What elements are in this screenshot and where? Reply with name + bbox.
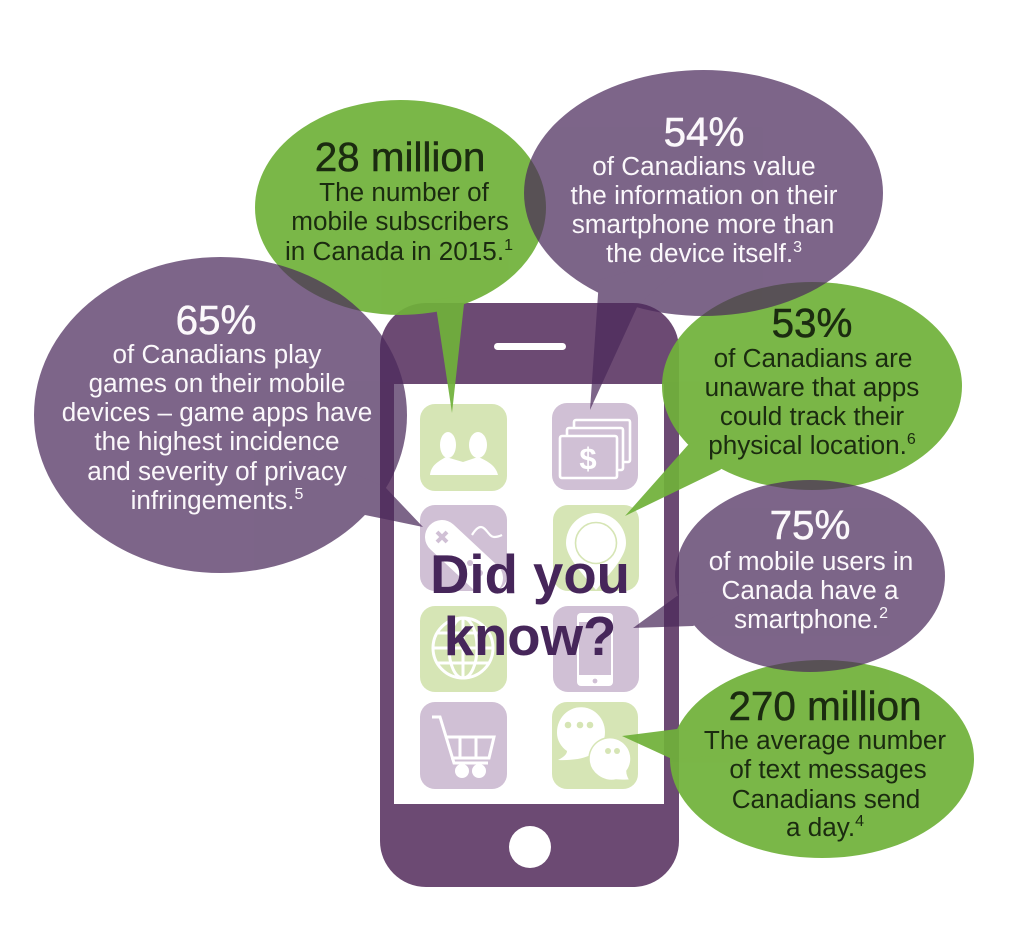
- callout: 53 percent: of Canadians are: [714, 343, 912, 373]
- bubble and tail: [255, 100, 546, 413]
- callout: 65 percent: devices – game apps have: [62, 397, 372, 427]
- icon: chat bubbles: [552, 702, 638, 789]
- callout: 75 percent: [633, 480, 945, 672]
- callout: 28 million: The number of: [319, 177, 490, 207]
- callout: 28 million: 1: [504, 237, 513, 254]
- callout: 270 million: 270 million: [728, 683, 922, 729]
- callout: 65 percent: [34, 257, 423, 573]
- phone home button: [509, 826, 551, 868]
- title: Did you know?: know?: [444, 606, 616, 667]
- callout: 75 percent: 75%: [770, 502, 850, 548]
- callout: 270 million: of text messages: [729, 754, 927, 784]
- callout: 53 percent: [625, 282, 962, 516]
- icon: location pin: [553, 505, 639, 591]
- callout: 65 percent: the highest incidence: [94, 426, 340, 456]
- bubble and tail: [622, 660, 974, 858]
- callout: 270 million: Canadians send: [732, 784, 920, 814]
- callout: 270 million: a day.: [786, 812, 855, 842]
- callout: 53 percent: physical location.: [708, 430, 907, 460]
- icon: banknotes: [552, 403, 638, 490]
- callout: 53 percent: could track their: [720, 401, 904, 431]
- callout: 75 percent: of mobile users in: [709, 546, 913, 576]
- callout: 65 percent: infringements.: [131, 485, 294, 515]
- phone speaker: [494, 343, 566, 350]
- callout: 54 percent: the device itself.: [606, 238, 793, 268]
- bubble and tail: [625, 282, 962, 516]
- callout: 28 million: 28 million: [315, 134, 485, 180]
- phone body: [380, 303, 679, 887]
- callout: 65 percent: 5: [294, 486, 303, 503]
- callout: 54 percent: [524, 70, 883, 410]
- callout: 28 million: in Canada in 2015.: [285, 236, 504, 266]
- callout: 75 percent: Canada have a: [722, 575, 899, 605]
- bubble and tail: [524, 70, 883, 410]
- callout: 75 percent: smartphone.: [734, 604, 879, 634]
- callout: 54 percent: smartphone more than: [572, 209, 834, 239]
- icon: banknotes: $: [579, 441, 597, 476]
- callout: 28 million: mobile subscribers: [291, 206, 509, 236]
- phone screen: [394, 384, 664, 804]
- title: Did you know?: [430, 544, 630, 667]
- callout: 270 million: [622, 660, 974, 858]
- callout: 65 percent: 65%: [176, 297, 256, 343]
- callout: 270 million: 4: [855, 813, 864, 830]
- callout: 54 percent: of Canadians value: [592, 151, 816, 181]
- bubble and tail: [34, 257, 423, 573]
- callout: 53 percent: 53%: [772, 300, 852, 346]
- callout: 65 percent: and severity of privacy: [87, 456, 347, 486]
- callout: 54 percent: 3: [793, 239, 802, 256]
- bubble and tail: [633, 480, 945, 672]
- smartphone: [380, 303, 679, 887]
- callout: 270 million: The average number: [704, 725, 946, 755]
- callout: 54 percent: 54%: [664, 109, 744, 155]
- callout: 65 percent: of Canadians play: [113, 339, 321, 369]
- title: Did you know?: Did you: [430, 544, 630, 605]
- callout: 53 percent: 6: [907, 431, 916, 448]
- callout: 75 percent: 2: [879, 605, 888, 622]
- icon: mobile phone: [553, 606, 639, 692]
- callout: 54 percent: the information on their: [571, 180, 838, 210]
- callout: 53 percent: unaware that apps: [705, 372, 919, 402]
- icon: shopping cart: [420, 702, 507, 789]
- callout: 28 million: [255, 100, 546, 413]
- icon: globe: [420, 606, 507, 692]
- icon: people: [420, 404, 507, 491]
- callout: 65 percent: games on their mobile: [89, 368, 345, 398]
- icon: game controller: [420, 505, 507, 591]
